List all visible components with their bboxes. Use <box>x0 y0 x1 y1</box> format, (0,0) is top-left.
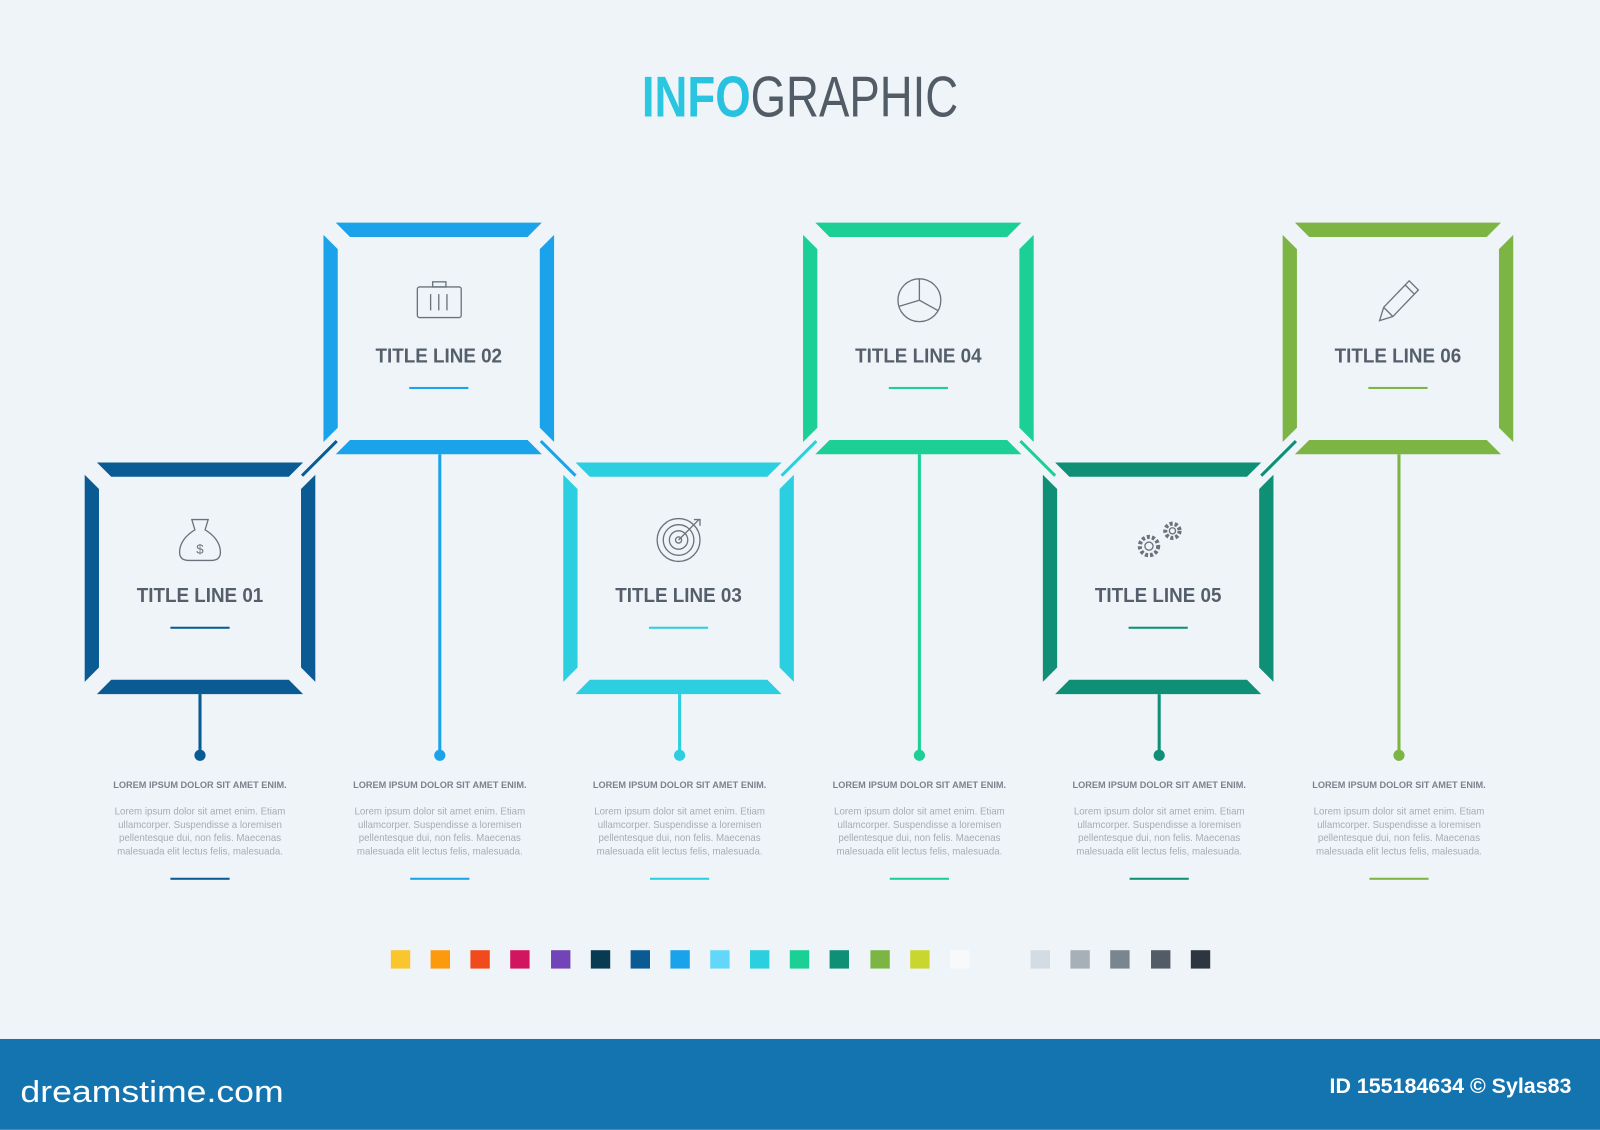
icon: suitcase <box>417 282 461 318</box>
icon: pie chart <box>898 279 941 322</box>
panel: step 03: TITLE LINE 03 <box>615 585 742 607</box>
panel: step 03 <box>563 462 794 694</box>
icon: pen <box>1380 281 1418 321</box>
text block: 06: ullamcorper. Suspendisse a loremisen <box>1317 820 1481 831</box>
text block: 06: pellentesque dui, non felis. Maecenas <box>1318 833 1480 844</box>
text block: 02: ullamcorper. Suspendisse a loremisen <box>358 820 522 831</box>
panel: step 06: TITLE LINE 06 <box>1335 345 1461 367</box>
panel: step 02 <box>323 223 554 454</box>
text block: 02: Lorem ipsum dolor sit amet enim. Etiam <box>354 806 525 817</box>
text block: 02: pellentesque dui, non felis. Maecenas <box>359 833 521 844</box>
text block: 03: malesuada elit lectus felis, malesuada. <box>597 846 763 857</box>
text block: 03: LOREM IPSUM DOLOR SIT AMET ENIM. <box>593 780 766 790</box>
panel: step 06 <box>1283 223 1513 454</box>
text block: 06 <box>1312 780 1486 880</box>
icon: target <box>657 519 700 561</box>
text block: 01: Lorem ipsum dolor sit amet enim. Etiam <box>115 806 285 817</box>
text block: 04: Lorem ipsum dolor sit amet enim. Etiam <box>834 806 1005 817</box>
icon: money bag: $ <box>196 541 204 556</box>
text block: 03 <box>593 780 766 880</box>
text block: 01: ullamcorper. Suspendisse a loremisen <box>118 820 282 831</box>
text block: 04: pellentesque dui, non felis. Maecenas <box>838 833 1001 844</box>
panel: step 05: TITLE LINE 05 <box>1095 585 1221 607</box>
text block: 06: LOREM IPSUM DOLOR SIT AMET ENIM. <box>1312 780 1486 790</box>
text block: 01: LOREM IPSUM DOLOR SIT AMET ENIM. <box>113 780 287 790</box>
footer band: dreamstime.com <box>20 1075 284 1109</box>
stems and dots <box>200 454 1399 755</box>
text block: 02: malesuada elit lectus felis, malesuada. <box>357 846 523 857</box>
text block: 02 <box>353 780 527 880</box>
text block: 04 <box>833 780 1006 880</box>
text block: 05: malesuada elit lectus felis, malesuada. <box>1076 846 1242 857</box>
connectors <box>302 441 1296 476</box>
text block: 04: LOREM IPSUM DOLOR SIT AMET ENIM. <box>833 780 1006 790</box>
text block: 01 <box>113 780 287 880</box>
text block: 03: Lorem ipsum dolor sit amet enim. Etiam <box>594 806 765 817</box>
text block: 06: malesuada elit lectus felis, malesuada. <box>1316 846 1482 857</box>
text block: 05: LOREM IPSUM DOLOR SIT AMET ENIM. <box>1072 780 1246 790</box>
icon: money bag <box>180 520 220 560</box>
text block: 03: pellentesque dui, non felis. Maecenas <box>599 833 761 844</box>
color palette <box>391 950 1210 969</box>
panel: step 01 <box>85 462 315 694</box>
text block: 04: ullamcorper. Suspendisse a loremisen <box>838 820 1001 831</box>
panel: step 01: TITLE LINE 01 <box>137 585 263 607</box>
text block: 06: Lorem ipsum dolor sit amet enim. Etiam <box>1314 806 1484 817</box>
text block: 01: pellentesque dui, non felis. Maecenas <box>119 833 281 844</box>
text block: 05: ullamcorper. Suspendisse a loremisen <box>1077 820 1241 831</box>
title: INFOGRAPHIC <box>642 66 958 130</box>
text block: 05: pellentesque dui, non felis. Maecenas <box>1078 833 1240 844</box>
panel: step 05 <box>1043 462 1273 694</box>
panel: step 04 <box>803 223 1034 454</box>
text block: 03: ullamcorper. Suspendisse a loremisen <box>598 820 761 831</box>
icon: gears <box>1140 524 1180 555</box>
panel: step 02: TITLE LINE 02 <box>376 345 502 367</box>
text block: 04: malesuada elit lectus felis, malesuada. <box>836 846 1002 857</box>
text block: 05: Lorem ipsum dolor sit amet enim. Etiam <box>1074 806 1245 817</box>
footer band: ID 155184634 © Sylas83 <box>1330 1074 1572 1098</box>
text block: 05 <box>1072 780 1246 880</box>
footer band <box>0 1039 1600 1130</box>
text block: 01: malesuada elit lectus felis, malesuada. <box>117 846 283 857</box>
panel: step 04: TITLE LINE 04 <box>855 345 982 367</box>
text block: 02: LOREM IPSUM DOLOR SIT AMET ENIM. <box>353 780 527 790</box>
